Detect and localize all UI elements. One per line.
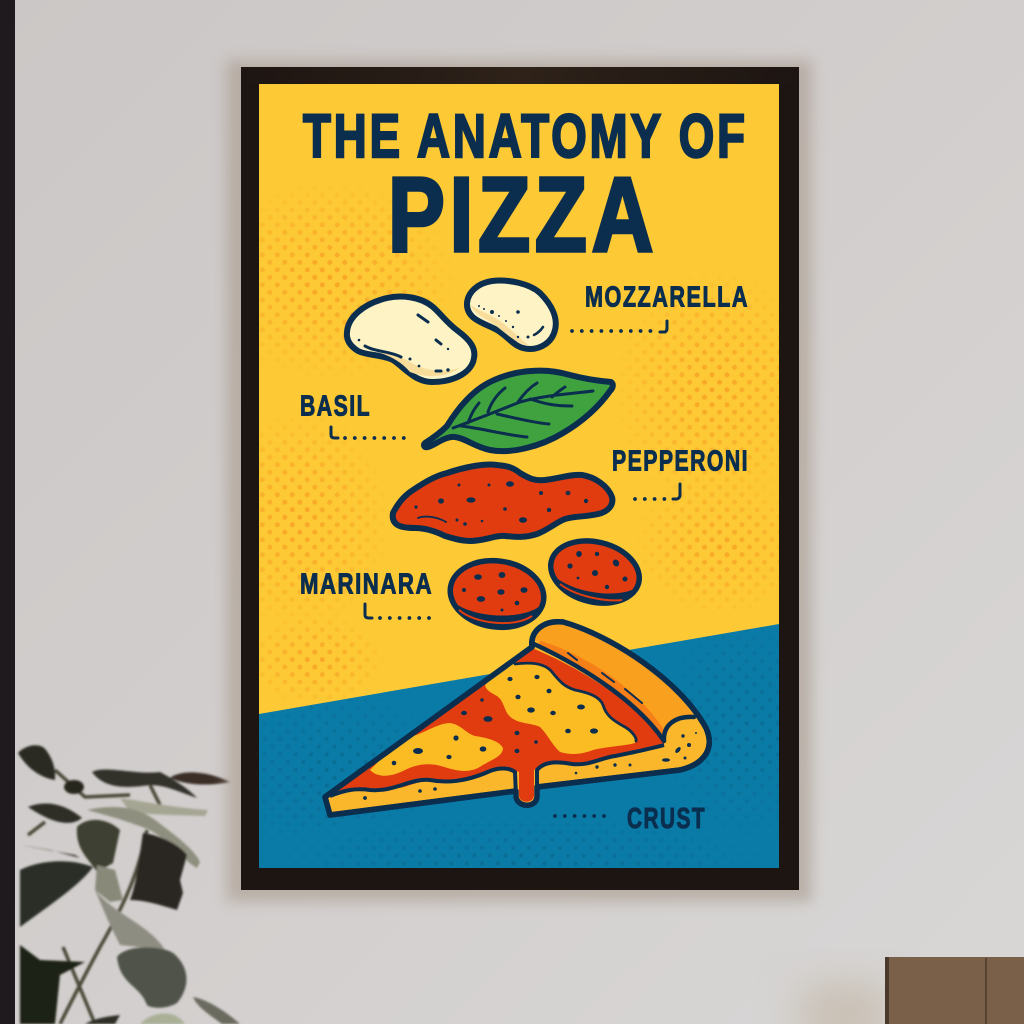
marinara sauce <box>393 464 612 541</box>
label: basil <box>300 390 407 438</box>
label: marinara: MARINARA <box>300 568 433 600</box>
label: marinara <box>300 568 433 618</box>
crust edge outer <box>325 622 709 815</box>
mozzarella pieces <box>347 281 556 382</box>
basil leaf <box>424 371 613 451</box>
poster panel <box>259 84 779 868</box>
label: crust: CRUST <box>627 803 706 835</box>
frame shadow <box>226 60 812 902</box>
blue table band <box>259 624 779 868</box>
label: basil: BASIL <box>300 390 371 422</box>
label: pepperoni <box>612 446 749 499</box>
label: mozzarella: MOZZARELLA <box>585 282 749 314</box>
title: THE ANATOMY OF <box>303 102 748 170</box>
halftone dots on blue <box>259 624 779 868</box>
pepperoni slice right <box>544 532 646 612</box>
crust rim <box>535 623 694 738</box>
title: PIZZA <box>388 156 658 274</box>
pepperoni slice left <box>446 555 548 633</box>
dark door edge at left <box>0 0 15 1024</box>
pizza slice <box>325 622 709 815</box>
slice base crust <box>325 622 709 815</box>
sauce lower edge <box>330 745 664 805</box>
potted plant <box>18 745 240 1024</box>
sauce layer <box>331 648 664 802</box>
title <box>303 102 748 274</box>
halftone dots on yellow <box>259 180 779 710</box>
label: mozzarella <box>572 282 749 332</box>
poster frame <box>241 67 799 890</box>
pizza toppings dots <box>363 675 697 800</box>
cheese outline <box>515 663 636 741</box>
cheese patch small <box>370 723 503 776</box>
crust curl <box>534 644 694 741</box>
cheese patch large <box>485 663 635 754</box>
label: pepperoni: PEPPERONI <box>612 446 749 478</box>
wooden furniture corner <box>800 957 1024 1024</box>
